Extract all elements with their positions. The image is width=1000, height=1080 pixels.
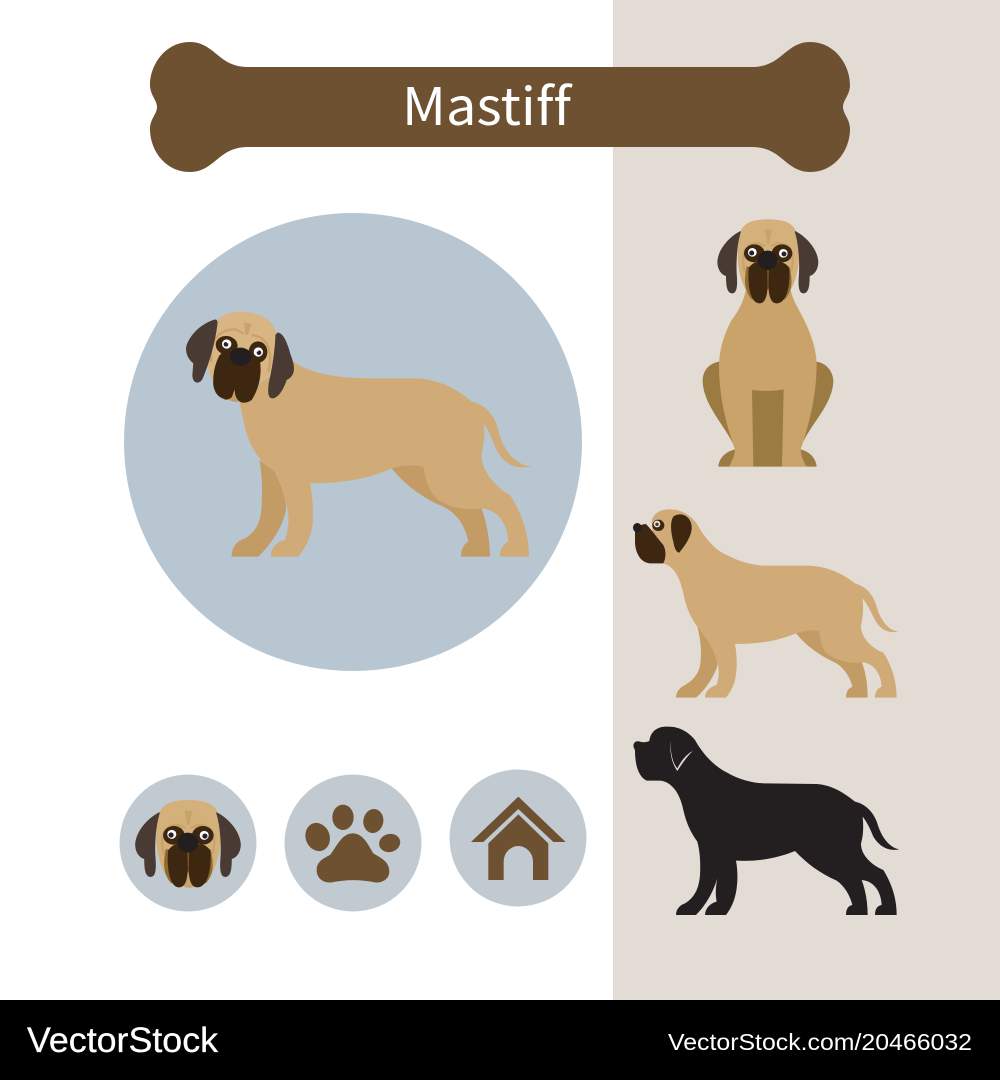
icon: paw print xyxy=(284,774,422,912)
main dog: standing three-quarter view xyxy=(186,312,532,557)
black silhouette dog xyxy=(633,727,899,915)
background: white panel xyxy=(0,0,613,1000)
footer logo text: VectorStock xyxy=(27,1021,219,1060)
icon: dog face xyxy=(120,774,256,912)
footer url text: VectorStock.com/20466032 xyxy=(668,1029,972,1055)
icon: dog house xyxy=(450,770,586,906)
main dog head xyxy=(186,312,294,403)
footer bar xyxy=(0,1000,1000,1080)
panel: beige right column xyxy=(613,0,1000,1000)
sitting dog: front view xyxy=(703,219,833,467)
title banner: bone xyxy=(150,42,850,172)
title: Mastiff xyxy=(402,65,573,140)
side-profile dog xyxy=(633,509,898,698)
main circle xyxy=(124,213,582,671)
